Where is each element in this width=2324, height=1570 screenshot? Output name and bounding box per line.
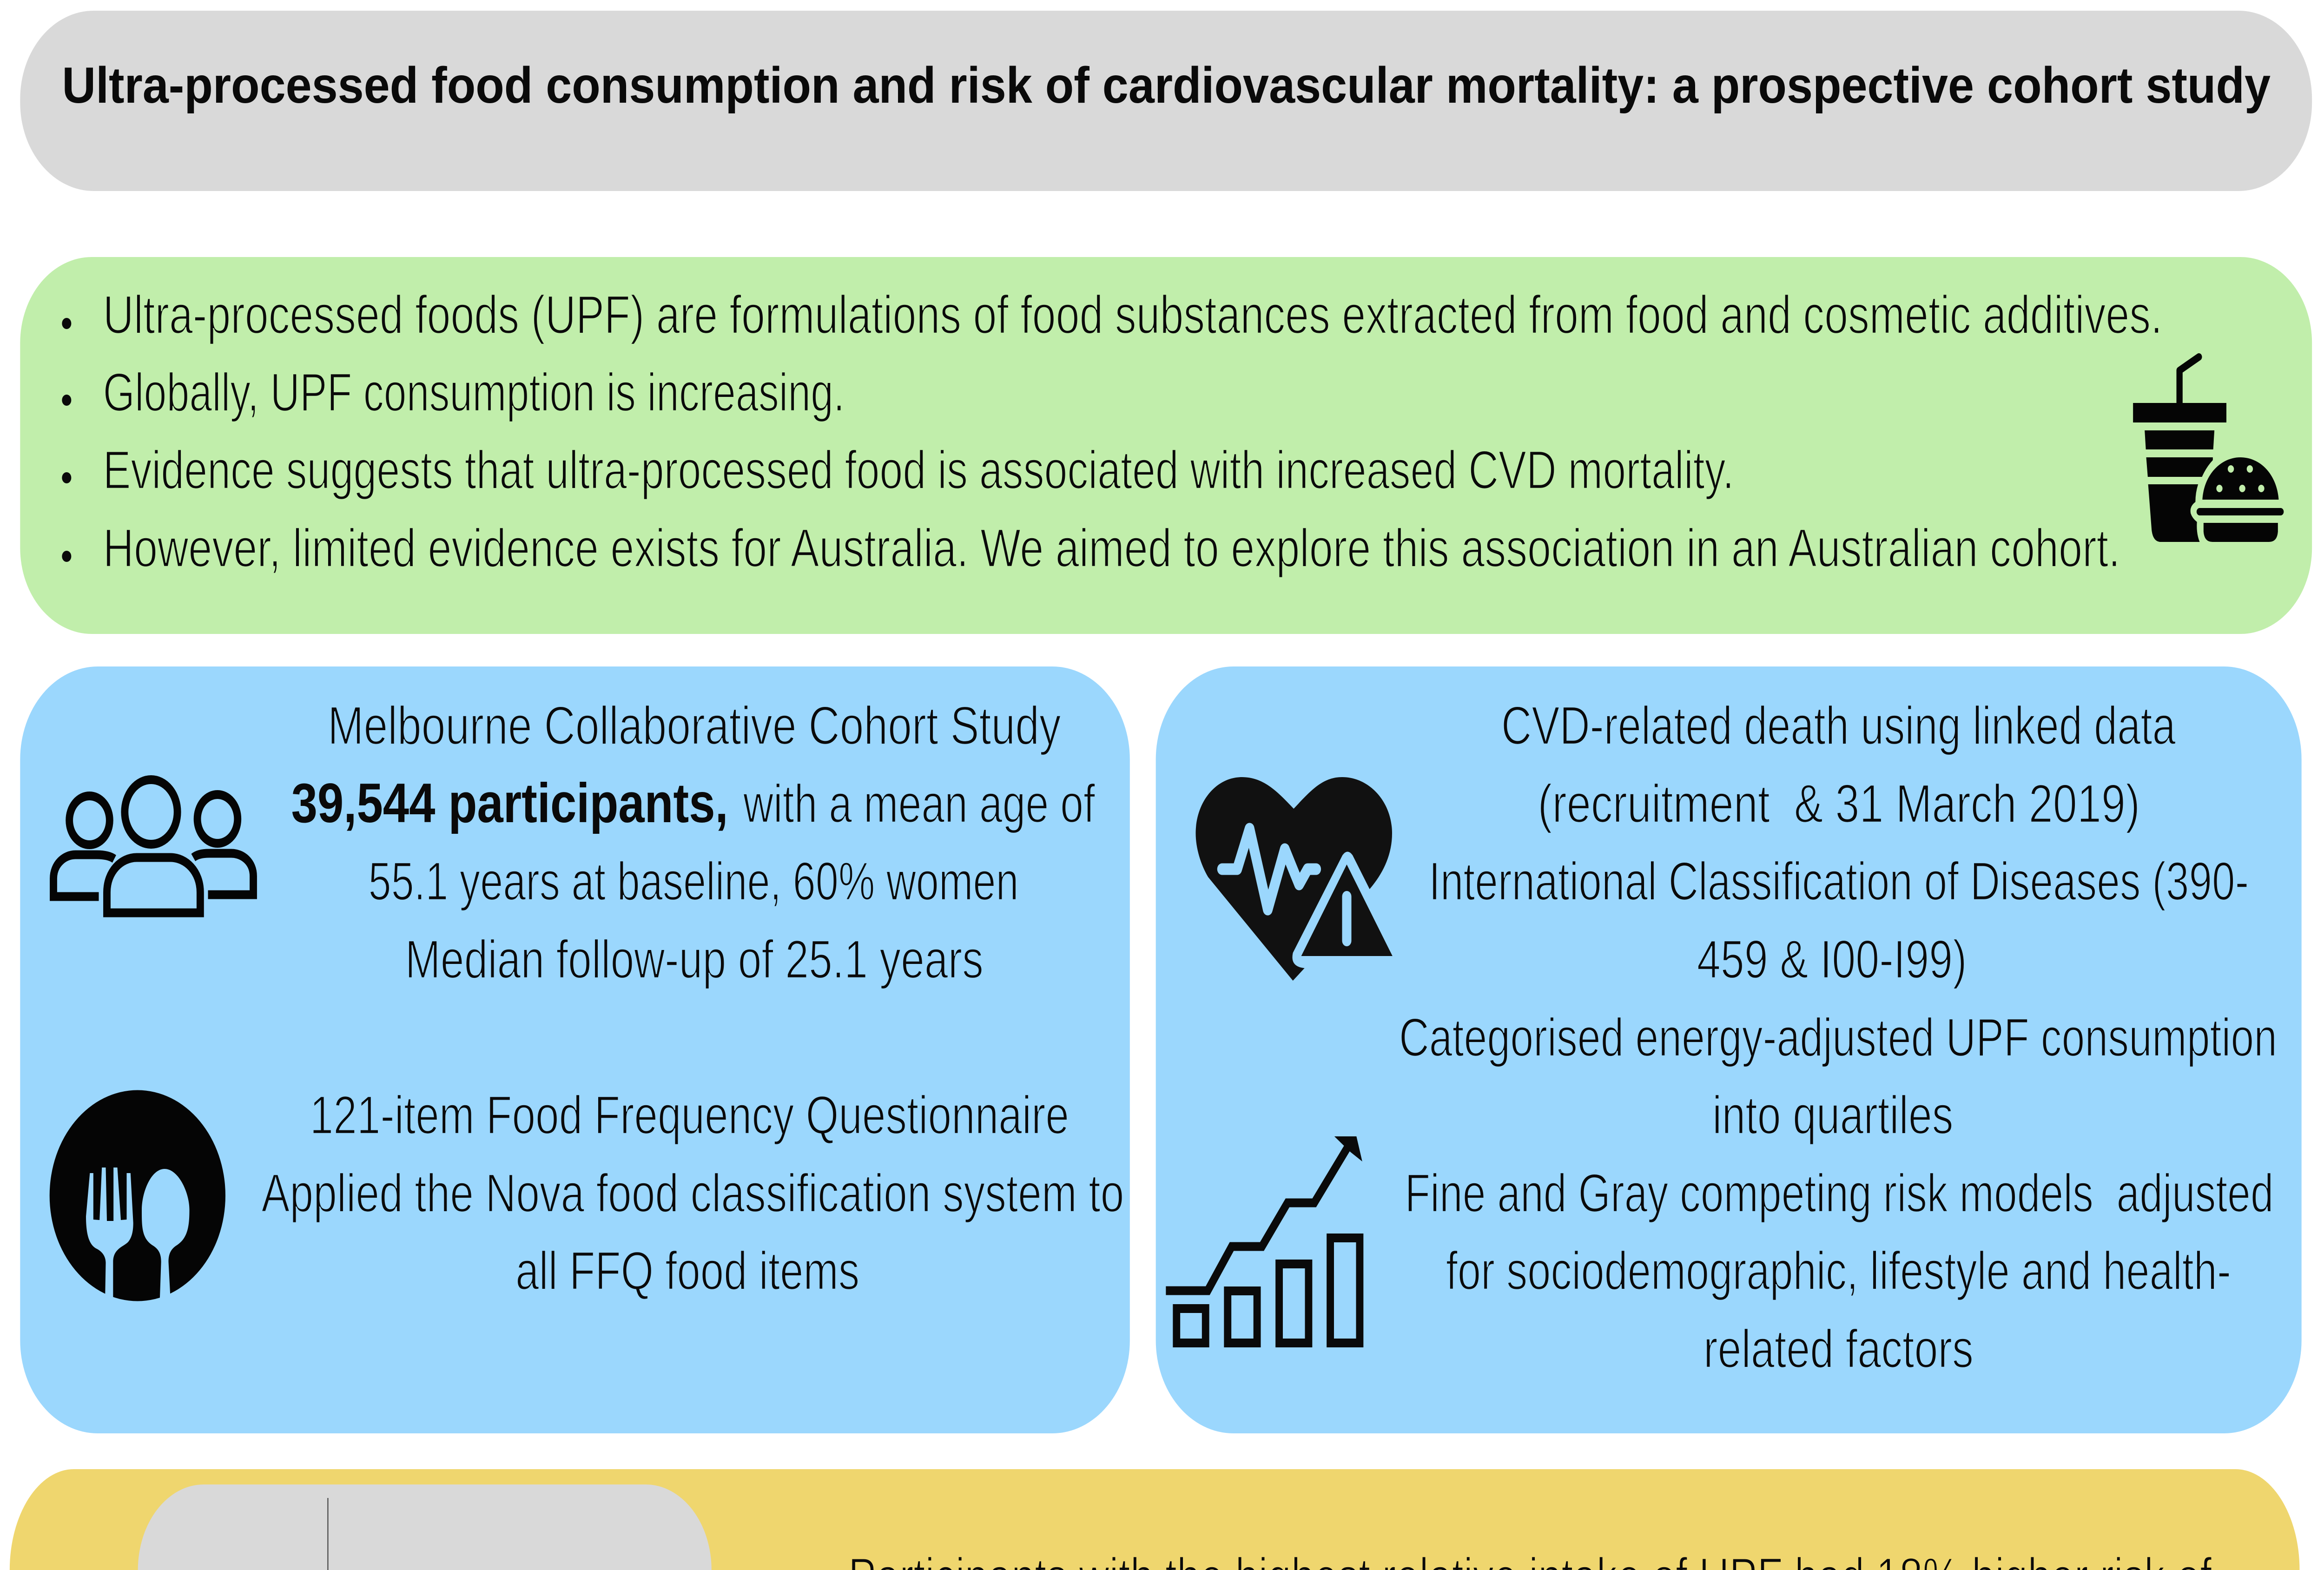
panel: outcomes and analysis (1156, 666, 2302, 1433)
analysis description text: Fine and Gray competing risk models adjusted (1405, 1163, 2274, 1223)
cohort description text (291, 695, 1095, 989)
cohort description text: 55.1 years at baseline, 60% women (368, 851, 1019, 911)
panel: background (20, 257, 2312, 634)
panel: results (10, 1469, 2299, 1570)
panel: study population and dietary assessment (20, 666, 1130, 1433)
icon: rising bar chart with arrow (1166, 1136, 1362, 1343)
analysis description text: for sociodemographic, lifestyle and health- (1446, 1240, 2231, 1301)
outcome description text: CVD-related death using linked data (1501, 695, 2176, 756)
outcome description text: (recruitment & 31 March 2019) (1538, 773, 2140, 834)
cohort description text: Median follow-up of 25.1 years (405, 929, 984, 989)
bullet list: However, limited evidence exists for Australia. We aimed to explore this association in an Australian cohort. (103, 518, 2120, 578)
questionnaire description text: Applied the Nova food classification system to (262, 1163, 1124, 1223)
icon: people (53, 780, 253, 913)
icon: plate with fork and spoon (50, 1090, 225, 1306)
outcome description text: 459 & I00-I99) (1697, 929, 1967, 989)
cohort description text: 39,544 participants, (291, 772, 728, 834)
bullet list (62, 284, 2163, 578)
icon: drink and burger (2133, 357, 2284, 542)
questionnaire description text: 121-item Food Frequency Questionnaire (310, 1085, 1069, 1145)
analysis description text: into quartiles (1712, 1085, 1954, 1145)
bullet list: Globally, UPF consumption is increasing. (103, 362, 845, 422)
analysis description text: Categorised energy-adjusted UPF consumption (1399, 1007, 2277, 1068)
chart panel (138, 1484, 712, 1570)
questionnaire description text (262, 1085, 1124, 1301)
panel: title banner (20, 11, 2312, 191)
icon: heart with warning triangle (1195, 777, 1393, 981)
outcome description text: International Classification of Diseases (390- (1429, 851, 2249, 911)
analysis description text: related factors (1703, 1319, 1974, 1379)
bullet list: Ultra-processed foods (UPF) are formulations of food substances extracted from food and cosmetic additives. (103, 284, 2163, 345)
title: Ultra-processed food consumption and risk of cardiovascular mortality: a prospective cohort study (62, 57, 2271, 114)
outcome description text (1429, 695, 2249, 989)
cohort description text: Melbourne Collaborative Cohort Study (328, 695, 1061, 756)
questionnaire description text: all FFQ food items (515, 1240, 859, 1301)
bullet list: Evidence suggests that ultra-processed food is associated with increased CVD mortality. (103, 440, 1734, 500)
analysis description text (1399, 1007, 2277, 1379)
cohort description text: with a mean age of (743, 773, 1095, 834)
